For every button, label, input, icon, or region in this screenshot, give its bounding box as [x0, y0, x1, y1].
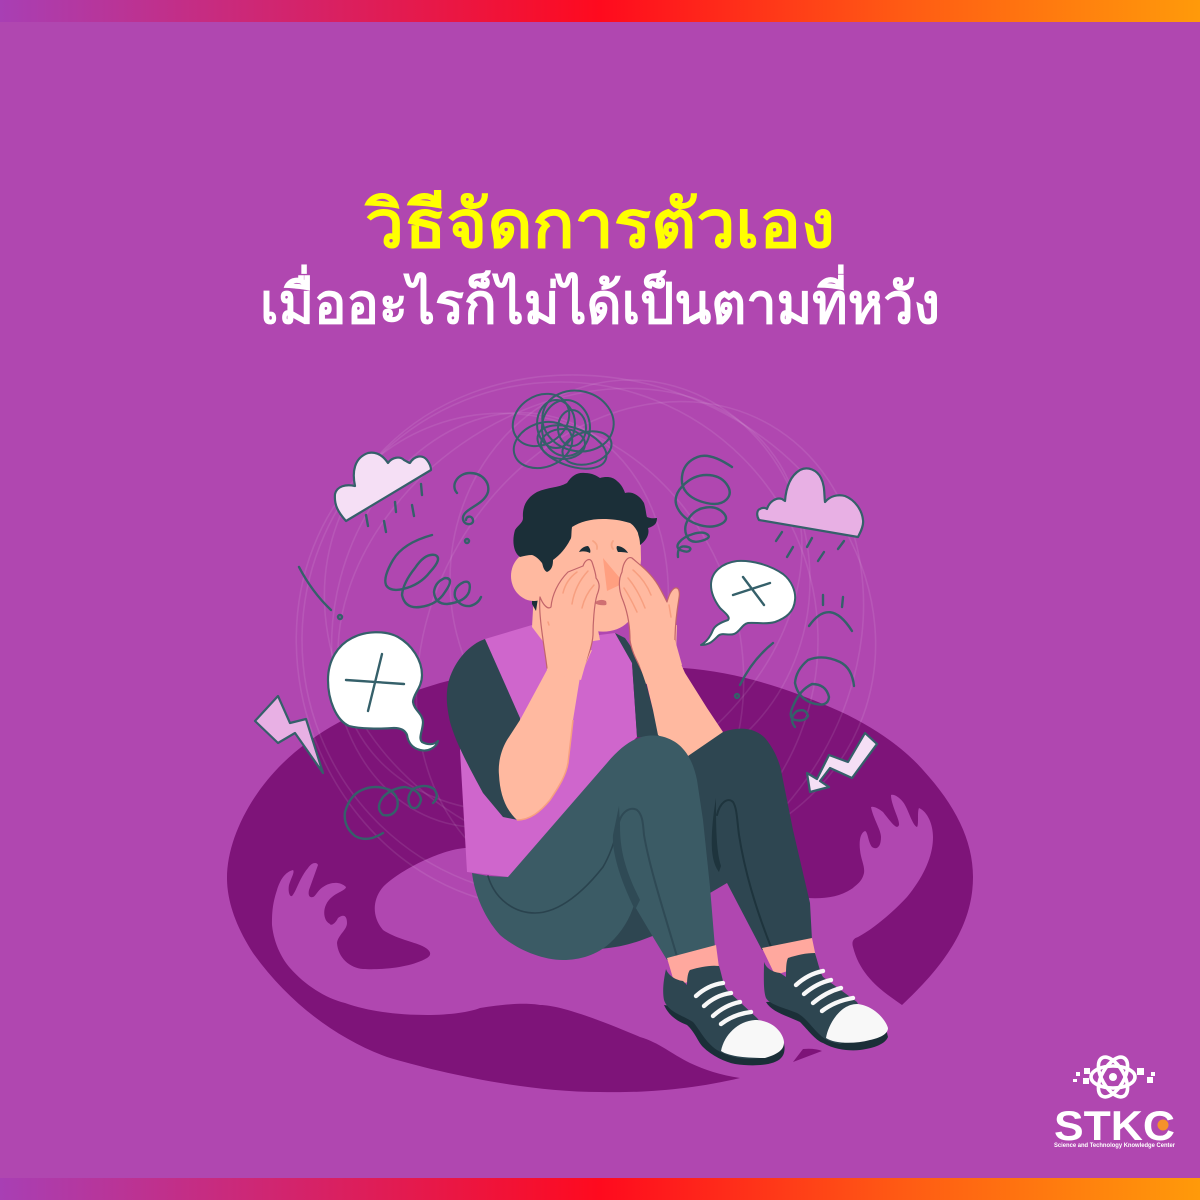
- icon: right rain cloud: [757, 468, 863, 561]
- icon: tangled scribble: [503, 383, 621, 477]
- small shadow triangle: [793, 1049, 822, 1062]
- title line 1: วิธีจัดการตัวเอง: [364, 187, 835, 261]
- icon: left rain cloud: [335, 453, 431, 532]
- left shoe: [663, 966, 785, 1065]
- icon: question mark: [454, 473, 488, 543]
- shadow shape with monster hands: [227, 665, 973, 1092]
- mouth: [594, 600, 606, 605]
- logo atom mark: [1091, 1052, 1135, 1102]
- icon: left lightning bolt: [255, 696, 323, 773]
- title: [260, 187, 940, 335]
- faint background scribble circles: [228, 299, 952, 980]
- forearm shadow edge: [517, 720, 573, 820]
- logo tagline: Science and Technology Knowledge Center: [1054, 1143, 1176, 1149]
- front leg: [472, 735, 715, 961]
- face: [540, 500, 641, 632]
- icon: small x speech bubble: [701, 561, 795, 645]
- right hand: [619, 558, 682, 684]
- bottom gradient bar: [0, 1178, 1200, 1200]
- back leg: [688, 729, 812, 950]
- icon: large x speech bubble: [328, 632, 438, 751]
- icon: bottom-left spiral: [345, 786, 437, 839]
- person: [447, 473, 888, 1065]
- ear: [511, 551, 557, 601]
- neck: [532, 590, 600, 648]
- nose: [603, 558, 624, 591]
- leg seams: [488, 798, 773, 960]
- icon: left exclamation mark: [299, 567, 342, 619]
- hair: [513, 473, 657, 572]
- left wrist patch: [547, 648, 590, 680]
- right shoe: [764, 953, 888, 1050]
- icon: downward zigzag arrow: [807, 733, 877, 792]
- eyes: [579, 546, 628, 553]
- icon: right exclamation mark: [735, 643, 773, 698]
- socks: [667, 938, 817, 985]
- left forearm: [499, 650, 592, 820]
- title line 2: เมื่ออะไรก็ไม่ได้เป็นตามที่หวัง: [260, 264, 940, 335]
- icon: sad face: [809, 595, 852, 631]
- logo pixel dots: [1073, 1068, 1155, 1084]
- vest sleeve: [447, 639, 520, 820]
- icon: looped doodle: [385, 535, 481, 607]
- left hand: [540, 559, 599, 677]
- logo orange dot: [1158, 1120, 1168, 1130]
- logo: STKC: [1054, 1052, 1176, 1149]
- brow creases: [593, 541, 613, 549]
- vest: [460, 625, 637, 877]
- top gradient bar: [0, 0, 1200, 22]
- logo wordmark: STKC: [1054, 1102, 1175, 1149]
- icon: right lower spiral: [791, 657, 854, 727]
- seat shadow: [600, 890, 655, 949]
- icon: top-right spiral: [676, 456, 732, 557]
- right forearm: [630, 625, 723, 756]
- vest strap: [615, 633, 660, 738]
- neck shadow: [532, 598, 538, 611]
